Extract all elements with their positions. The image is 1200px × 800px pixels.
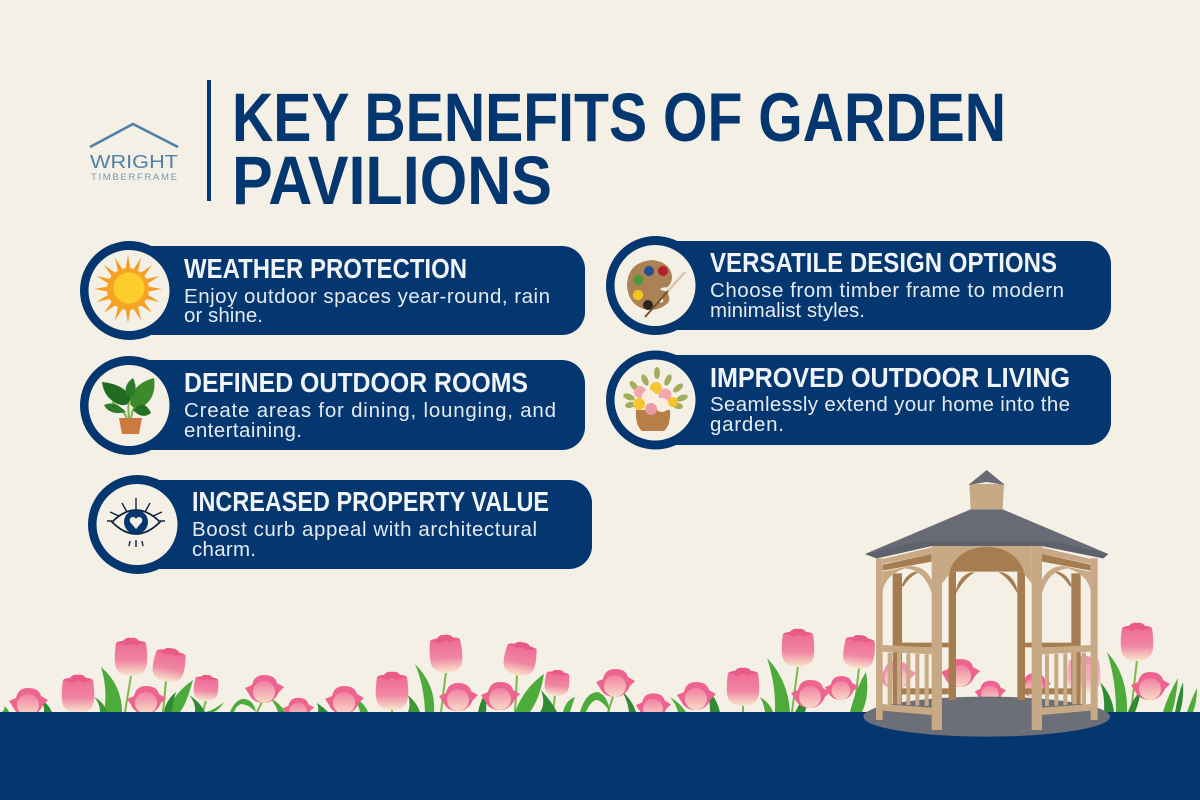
icon ring	[606, 236, 705, 335]
heading: VERSATILE DESIGN OPTIONS	[710, 247, 1057, 278]
roof	[865, 509, 1108, 558]
icon: eye with heart	[107, 498, 165, 547]
icon circle	[88, 365, 170, 446]
icon circle	[96, 484, 178, 565]
arch and header	[942, 546, 1032, 593]
description: Enjoy outdoor spaces year-round, rain	[184, 285, 550, 308]
heading: WEATHER PROTECTION	[184, 253, 467, 284]
title: KEY BENEFITS OF GARDEN	[232, 79, 1006, 156]
railings	[883, 645, 1091, 715]
side beams and brackets	[883, 547, 1091, 593]
description	[710, 393, 1070, 436]
heading: DEFINED OUTDOOR ROOMS	[184, 367, 528, 398]
pill background	[125, 246, 585, 335]
pill background	[651, 241, 1111, 330]
cupola roof	[968, 470, 1005, 485]
icon ring	[80, 241, 179, 340]
title	[232, 79, 1006, 219]
description: Choose from timber frame to modern	[710, 279, 1064, 302]
pill background	[133, 480, 592, 569]
icon ring	[606, 350, 705, 450]
description: entertaining.	[184, 419, 302, 442]
floor	[863, 697, 1110, 737]
heading: INCREASED PROPERTY VALUE	[192, 486, 549, 517]
description: garden.	[710, 413, 784, 436]
icon circle	[614, 360, 696, 440]
description: or shine.	[184, 304, 263, 327]
description	[184, 285, 550, 327]
tulips upright	[62, 623, 1153, 713]
title: PAVILIONS	[232, 142, 552, 219]
panel: weather protection	[80, 241, 585, 340]
description	[192, 518, 537, 561]
icon: flower basket	[622, 367, 689, 431]
cupola	[969, 484, 1004, 509]
description: Seamlessly extend your home into the	[710, 393, 1070, 416]
icon: potted plant	[102, 378, 154, 434]
panel: improved outdoor living	[606, 350, 1111, 450]
panel: versatile design options	[606, 236, 1111, 335]
description: Boost curb appeal with architectural	[192, 518, 537, 541]
tulip garden	[2, 623, 1197, 720]
icon ring	[80, 356, 179, 455]
title divider	[207, 80, 211, 201]
icon: sun	[94, 255, 162, 323]
heading: IMPROVED OUTDOOR LIVING	[710, 362, 1070, 393]
icon: paint palette	[627, 260, 685, 317]
description: Create areas for dining, lounging, and	[184, 399, 556, 422]
panel: defined outdoor rooms	[80, 356, 585, 455]
grass leaves	[2, 652, 1197, 712]
logo roof icon	[90, 124, 178, 147]
logo subtitle: TIMBERFRAME	[91, 172, 177, 183]
description	[184, 399, 556, 442]
ground band	[0, 712, 1200, 800]
roof edge	[865, 542, 1108, 558]
pavilion illustration	[863, 470, 1110, 737]
description	[710, 279, 1064, 322]
logo: Wright Timberframe	[90, 124, 178, 183]
description: minimalist styles.	[710, 299, 865, 322]
posts	[876, 546, 1098, 730]
pill background	[125, 360, 585, 450]
logo wordmark: WRIGHT	[90, 151, 178, 172]
icon ring	[88, 475, 187, 574]
back posts and rails	[893, 572, 1081, 703]
pill background	[651, 355, 1111, 445]
panel: increased property value	[88, 475, 592, 574]
icon circle	[88, 250, 170, 331]
icon circle	[614, 245, 696, 326]
stems	[125, 660, 1137, 712]
tulips open	[9, 669, 1170, 720]
description: charm.	[192, 538, 256, 561]
tulips behind pavilion	[877, 656, 1100, 703]
